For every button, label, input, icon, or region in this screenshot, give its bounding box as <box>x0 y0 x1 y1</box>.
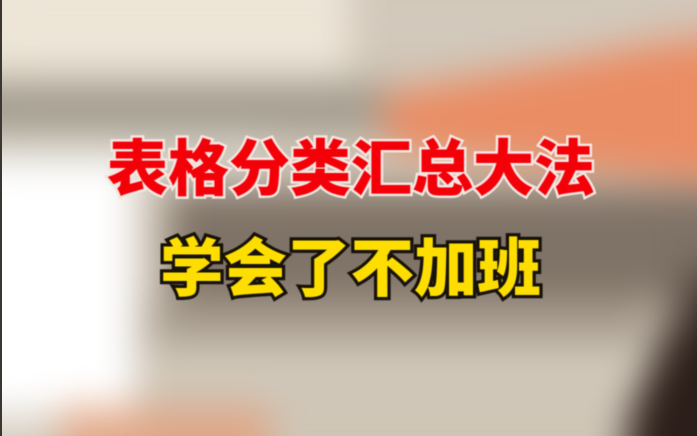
title: red headline: 表格分类汇总大法 <box>107 135 595 203</box>
left edge line <box>0 0 2 436</box>
subtitle: yellow headline: 学会了不加班 <box>160 235 541 305</box>
